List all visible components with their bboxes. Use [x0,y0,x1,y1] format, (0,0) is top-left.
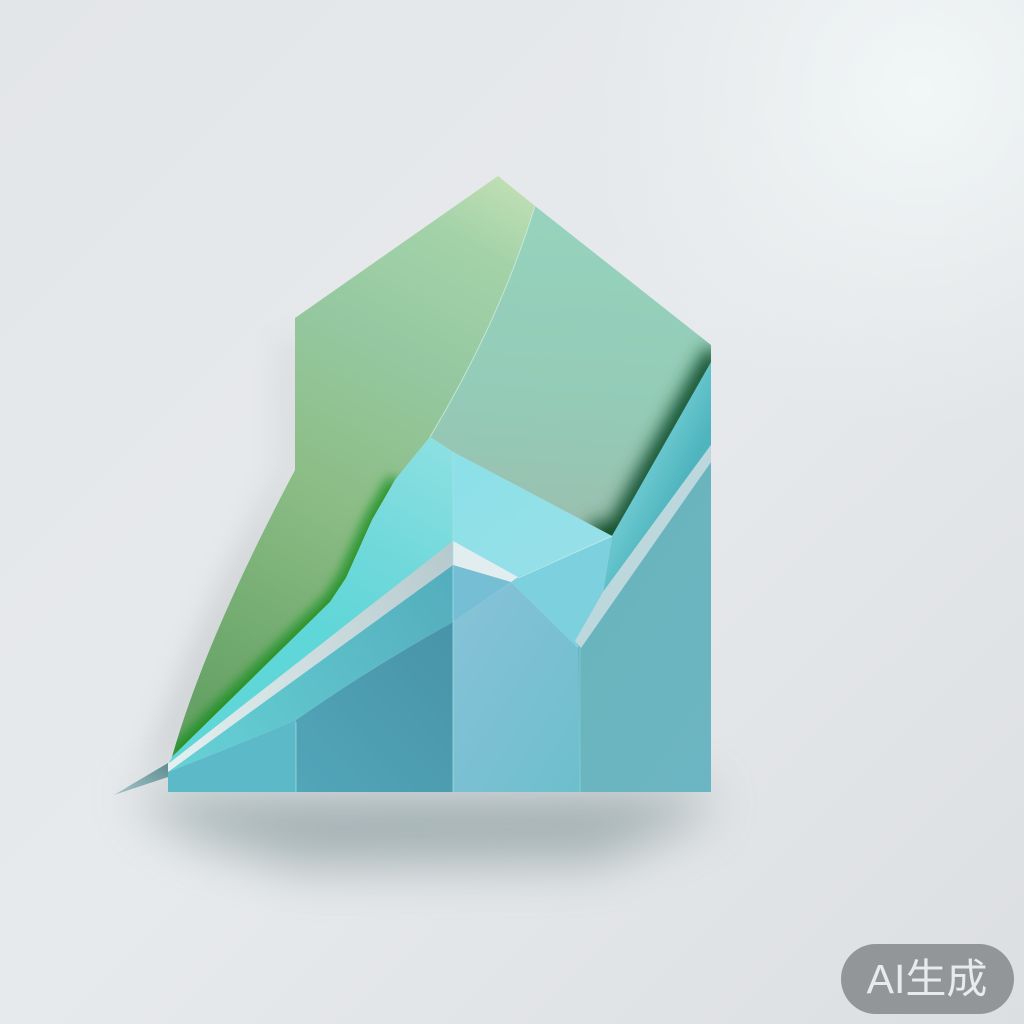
central blue panel [453,582,581,792]
tail tip [114,763,168,795]
right cyan facet [511,536,612,648]
green back panel [172,176,535,757]
right white band [575,445,711,648]
AI generated badge [841,944,1014,1014]
central cyan facet [453,452,612,578]
right lower panel [578,462,711,792]
central upper facet [453,565,511,622]
left blue panel [296,622,453,792]
left cyan fold [168,437,453,765]
lower fold strip [168,565,453,772]
teal back panel [430,206,711,536]
left edge panel [168,720,296,792]
dark fold shadow [590,352,716,540]
AI generated badge: AI生成 [867,956,987,1002]
fold lines [296,206,612,792]
right upper flap [603,362,711,592]
white crease band [168,541,518,772]
drop shadow [130,340,712,865]
green shade along fold [172,480,395,757]
